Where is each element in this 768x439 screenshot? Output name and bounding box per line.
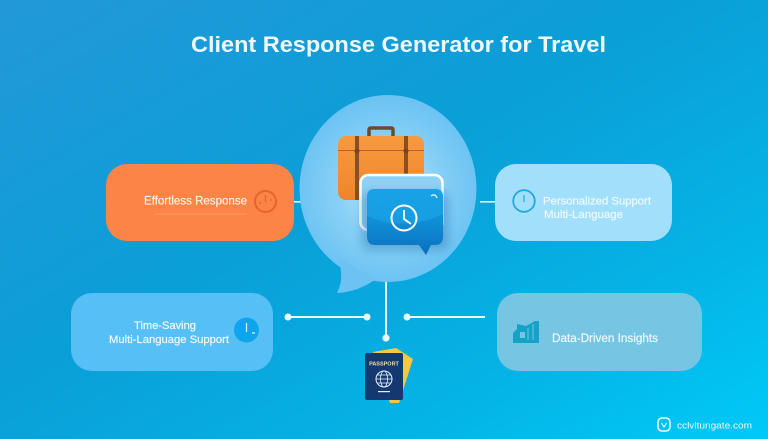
panel: personalized support <box>495 164 672 241</box>
text: personalized support: Personalized Support <box>543 196 651 208</box>
heading: effortless response: Effortless Response <box>144 196 247 208</box>
panel: time-saving <box>71 293 273 371</box>
icon: stopwatch orange <box>255 191 276 212</box>
panel: data-driven insights <box>497 293 702 371</box>
title: Client Response Generator for Travel <box>191 32 606 57</box>
icon: stopwatch blue <box>234 318 259 342</box>
icon: passport <box>365 348 413 403</box>
heading: data-driven insights: Data-Driven Insights <box>552 333 658 345</box>
icon: watermark logo <box>658 418 670 431</box>
footer watermark: cclvitungate.com <box>677 420 752 430</box>
text: personalized support: Multi-Language <box>544 209 623 221</box>
icon: message with clock <box>360 175 448 255</box>
icon: clock blue <box>513 190 535 212</box>
icon: suitcase <box>338 128 424 200</box>
text: time-saving: Time-Saving <box>134 320 196 332</box>
connector lines <box>284 201 495 342</box>
icon: passport: PASSPORT <box>369 362 400 368</box>
panel: effortless response <box>106 164 294 241</box>
central speech bubble <box>300 95 476 293</box>
footer watermark <box>658 418 752 431</box>
icon: bar chart <box>513 321 539 343</box>
text: time-saving: Multi-Language Support <box>109 334 229 346</box>
